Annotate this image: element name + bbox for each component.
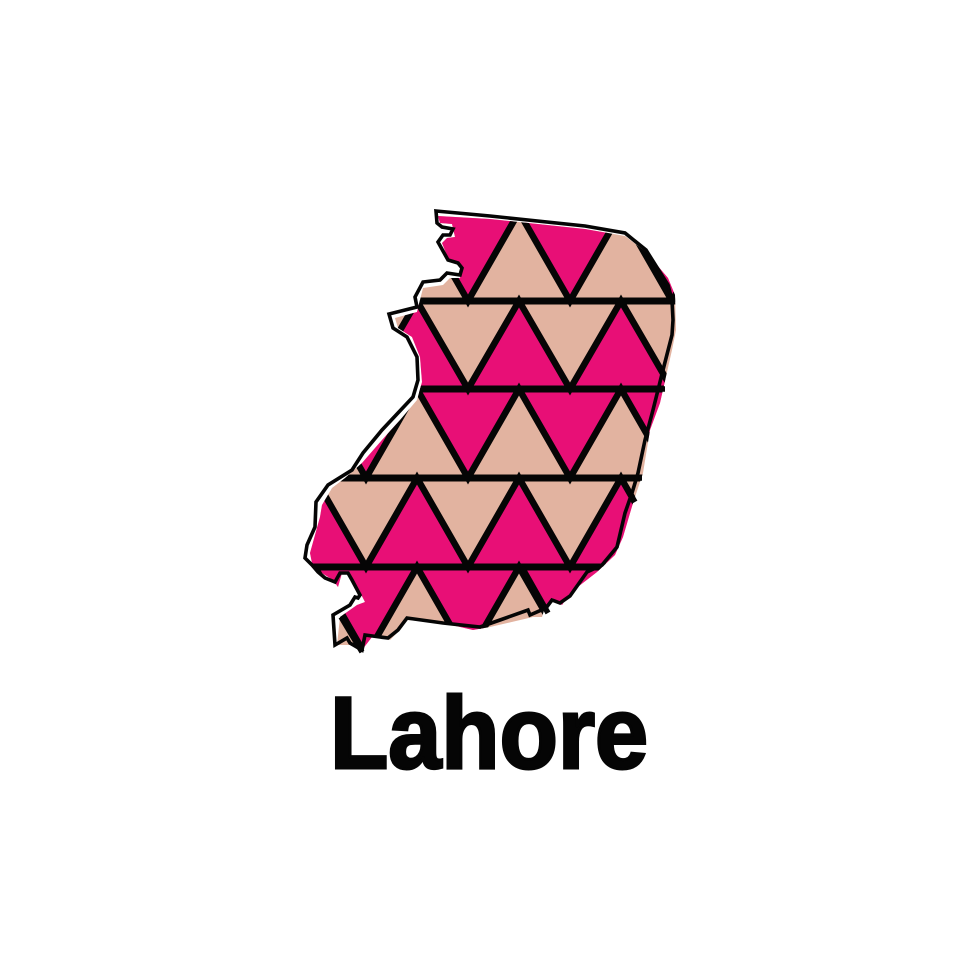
infographic: Lahore map with title	[303, 209, 676, 770]
map: protruding triangle line ends	[341, 301, 674, 652]
map: triangle-patterned fill	[310, 216, 676, 648]
title: Lahore	[330, 676, 648, 790]
map: black offset outline	[305, 211, 673, 650]
